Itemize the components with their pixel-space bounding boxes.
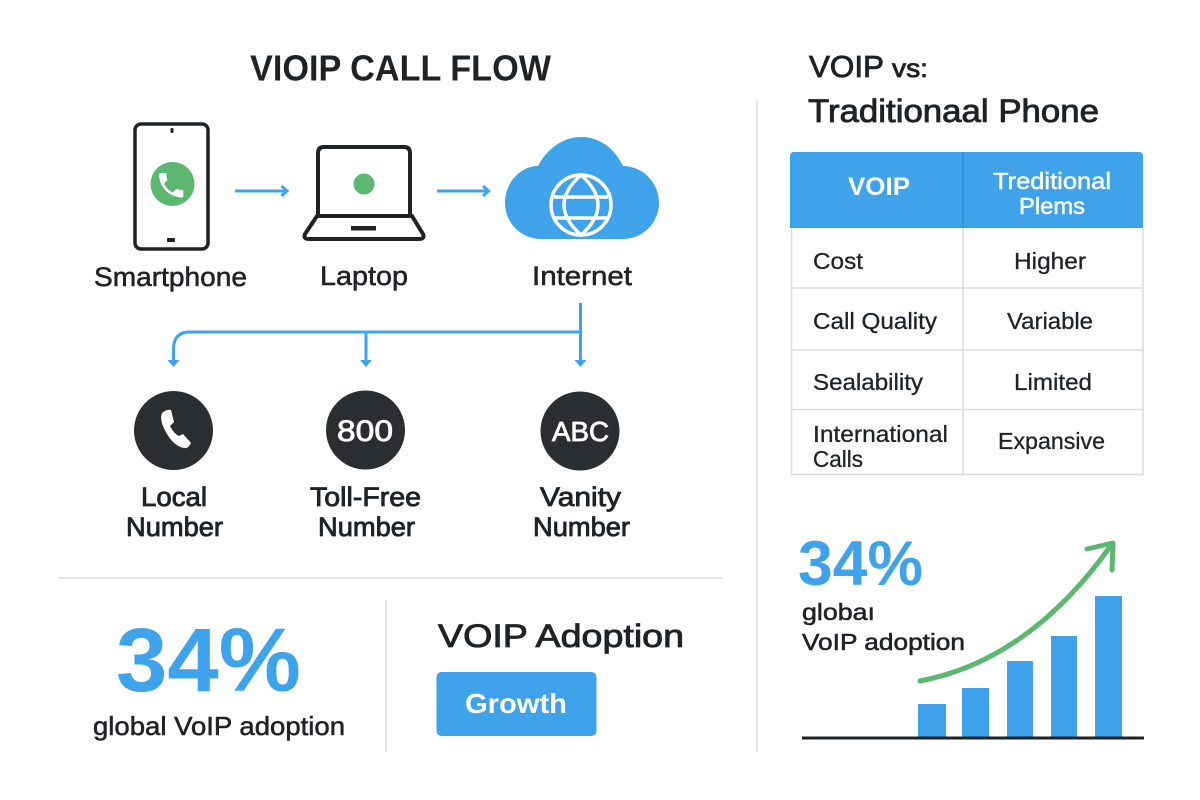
label: internet: Internet	[532, 261, 633, 291]
label: smartphone: Smartphone	[94, 262, 247, 292]
icon: laptop	[304, 147, 424, 239]
stat caption: global VoIP adoption	[93, 711, 345, 741]
icon: local number	[134, 391, 213, 470]
row: international calls: International	[813, 421, 948, 447]
table header: Plems	[1019, 193, 1085, 219]
row: scalability	[813, 369, 1092, 395]
arrow: growth trend	[920, 543, 1113, 681]
stat: 34% global VoIP adoption	[93, 611, 345, 741]
row: call quality: Variable	[1007, 308, 1093, 334]
row: international calls	[813, 421, 1105, 472]
row: scalability: Sealability	[813, 369, 924, 395]
heading: VOIP vs traditional phone: VOIP	[809, 49, 884, 84]
icon: vanity number: ABC	[552, 416, 609, 447]
table header: Treditional	[993, 168, 1111, 194]
icon: toll-free number	[326, 390, 405, 470]
label: vanity number: Vanity	[540, 482, 622, 512]
heading: VOIP vs traditional phone: vs:	[892, 53, 928, 83]
row: cost: Cost	[813, 248, 864, 274]
row: international calls: Expansive	[998, 428, 1105, 454]
panel: call flow	[94, 124, 659, 542]
callout heading: VOIP Adoption	[438, 618, 684, 654]
icon: vanity number	[540, 392, 620, 470]
row: cost	[813, 248, 1086, 274]
callout: VOIP adoption growth	[436, 618, 684, 736]
stat caption: VoIP adoption	[802, 629, 965, 655]
row: call quality	[813, 308, 1093, 334]
label: vanity number: Number	[533, 512, 630, 542]
arrow: laptop to internet	[437, 186, 488, 196]
label: toll-free number: Toll-Free	[310, 482, 421, 512]
arrow: smartphone to laptop	[235, 186, 287, 196]
label: local number: Number	[126, 512, 223, 542]
row: scalability: Limited	[1014, 369, 1092, 395]
label: laptop: Laptop	[320, 261, 408, 291]
table header	[790, 152, 1143, 228]
icon: internet cloud	[505, 137, 659, 239]
stat caption: globaı	[802, 599, 875, 625]
icon: smartphone	[135, 124, 208, 249]
chart axis	[802, 736, 1144, 740]
growth button	[436, 672, 596, 736]
table header: VOIP	[848, 173, 910, 201]
panel: adoption chart	[798, 529, 1144, 738]
table grid	[792, 228, 1143, 474]
big number: 34%	[116, 611, 301, 711]
label: local number: Local	[141, 482, 207, 512]
heading: VOIP vs traditional phone: Traditionaal Phone	[808, 93, 1099, 129]
row: cost: Higher	[1014, 248, 1086, 274]
label: toll-free number: Number	[318, 512, 415, 542]
bar chart	[918, 596, 1122, 738]
stat number: 34%	[798, 529, 923, 599]
row: call quality: Call Quality	[813, 308, 938, 334]
icon: toll-free number: 800	[337, 415, 393, 448]
row: international calls: Calls	[813, 446, 863, 472]
panel: comparison table	[790, 152, 1143, 474]
growth button: Growth	[465, 688, 567, 719]
arrow: internet branching to numbers	[168, 303, 586, 367]
title: VIOIP CALL FLOW	[250, 48, 551, 88]
